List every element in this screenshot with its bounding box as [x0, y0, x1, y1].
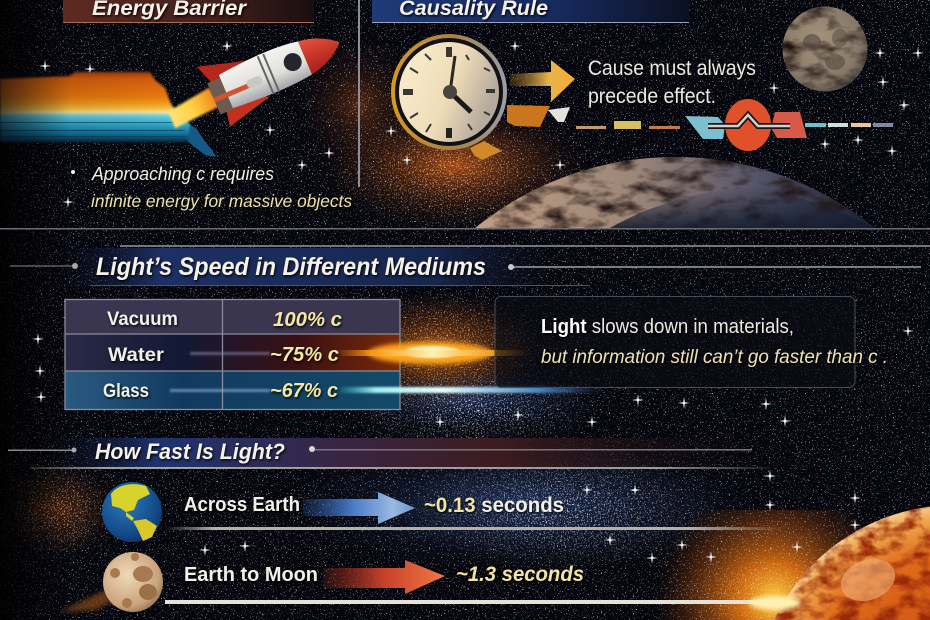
callout: light slows down: Light slows down in materials, [541, 316, 794, 338]
table: speed by medium: Vacuum [107, 309, 178, 330]
text: cause must precede effect: precede effect. [588, 85, 716, 108]
text: approaching c: infinite energy for massive objects [91, 191, 352, 211]
light trail behind rocket [0, 72, 216, 157]
callout: light slows down: but information still can’t go faster than c . [541, 347, 888, 368]
table: speed by medium: Glass [103, 381, 149, 402]
table: speed by medium [65, 299, 605, 410]
text: cause must precede effect: Cause must always [588, 57, 756, 80]
arrow: blue [303, 492, 415, 524]
arrow: red [323, 560, 445, 594]
icon: clock [391, 34, 507, 150]
section rules [0, 228, 930, 230]
section: light's speed in different mediums [10, 245, 930, 410]
callout: light slows down [495, 296, 888, 388]
light beams through table [170, 342, 605, 393]
timeline with causality break [576, 99, 893, 151]
icon: rocket [156, 12, 353, 147]
row: earth to moon: ~1.3 seconds [456, 563, 584, 586]
row: across earth: ~0.13 seconds [424, 494, 564, 517]
heading: how fast: How Fast Is Light? [95, 439, 285, 464]
arrow: gold cause arrow [470, 60, 575, 160]
heading band: Causality Rule [372, 0, 689, 23]
table: speed by medium: Water [108, 345, 165, 366]
moon [782, 6, 868, 92]
table: speed by medium: ~67% c [270, 380, 338, 402]
icon: moon [60, 552, 163, 612]
text: approaching c: Approaching c requires [91, 164, 274, 184]
icon: earth [102, 482, 162, 542]
row: across earth: Across Earth [184, 494, 300, 516]
planet horizon [475, 157, 875, 228]
heading: light's speed [10, 245, 930, 286]
row: earth to moon [60, 552, 780, 612]
section: how fast is light [8, 438, 930, 620]
glowing rule [165, 600, 780, 604]
row: across earth [102, 482, 785, 542]
heading band: Energy Barrier [63, 0, 314, 23]
text: cause must precede effect [588, 57, 756, 108]
heading: light's speed: Light’s Speed in Different Mediums [96, 253, 486, 281]
table: speed by medium: 100% c [273, 309, 342, 331]
heading: how fast [8, 438, 770, 469]
planet: mars [749, 507, 930, 620]
panel: energy barrier [0, 0, 353, 211]
panel: causality rule [372, 0, 893, 228]
table: speed by medium: ~75% c [270, 344, 339, 366]
row: earth to moon: Earth to Moon [184, 564, 318, 586]
divider between panels [358, 0, 360, 187]
text: approaching c [71, 164, 352, 211]
